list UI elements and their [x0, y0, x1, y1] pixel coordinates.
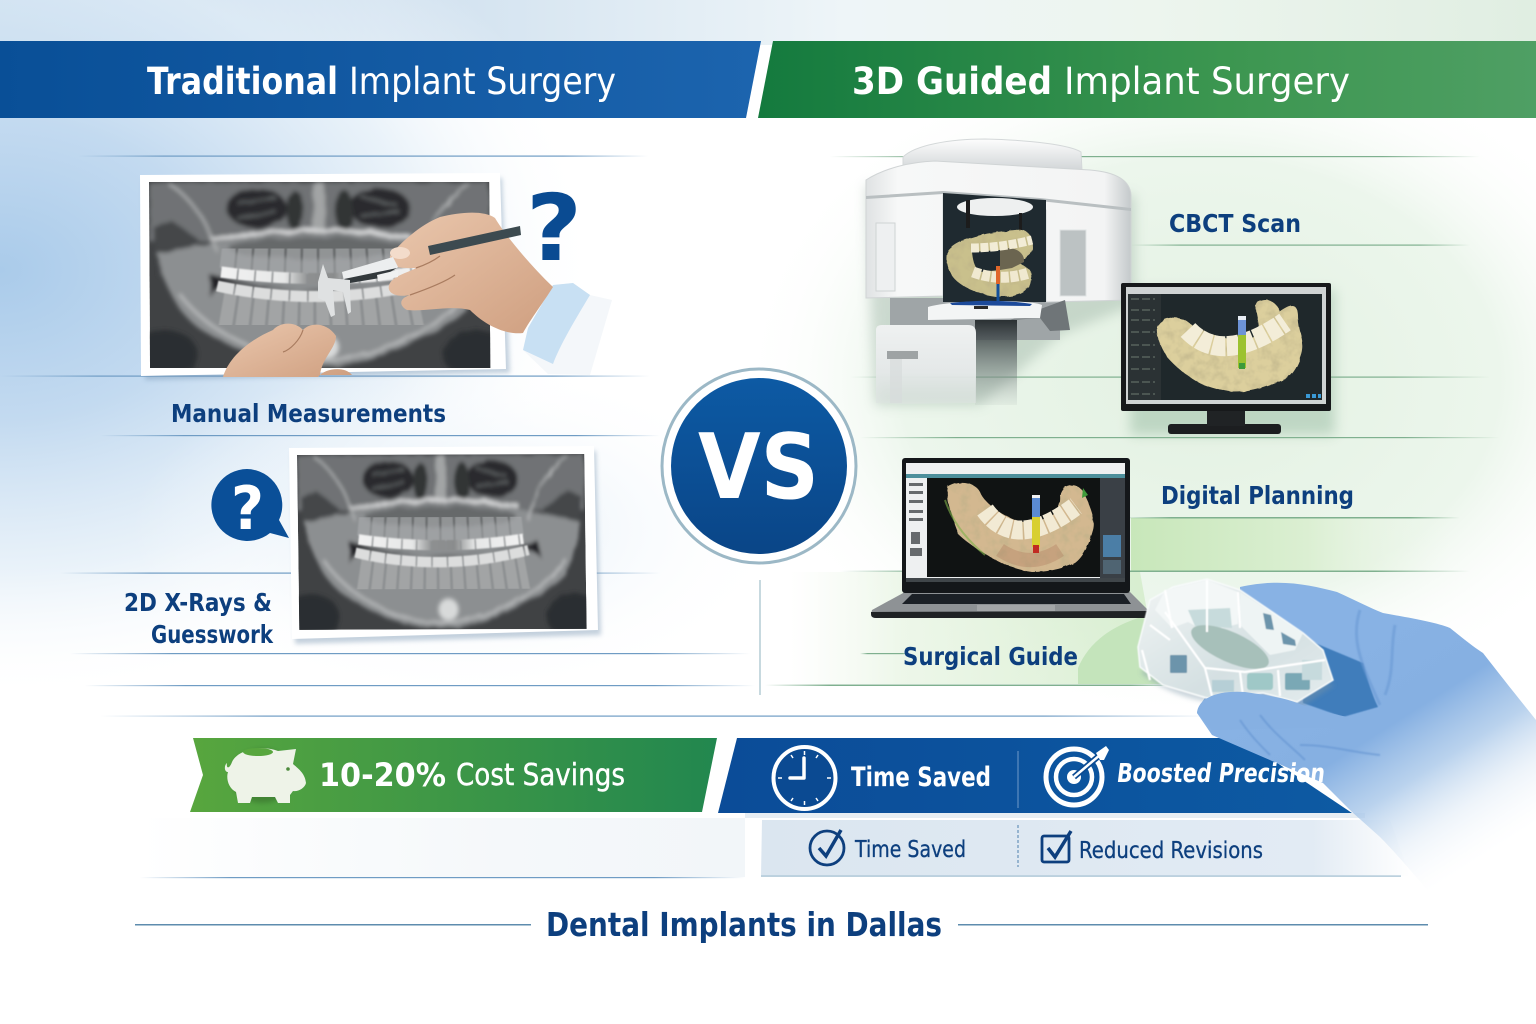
icon: check box — [1042, 831, 1071, 862]
VS badge: VS — [698, 415, 819, 520]
label: boosted precision: Boosted Precision — [1115, 759, 1327, 789]
sleeve — [523, 283, 612, 375]
surgical guide in gloved hand — [1138, 579, 1536, 920]
CBCT scanner — [866, 139, 1135, 405]
header: 3D guided implant surgery — [758, 41, 1536, 118]
sub panel: time saved and reduced revisions — [761, 820, 1410, 877]
dark chamber — [943, 193, 1046, 302]
label: CBCT scan: CBCT Scan — [1169, 209, 1301, 238]
label: digital planning: Digital Planning — [1161, 481, 1354, 510]
question bubble — [211, 469, 289, 544]
top cap — [903, 139, 1082, 170]
icon: piggy bank — [225, 748, 306, 803]
header: traditional implant surgery: Implant Surgery — [349, 60, 616, 103]
icon: clock — [774, 747, 836, 809]
bottom bar: cost savings: Cost Savings — [456, 758, 625, 793]
VS badge — [662, 369, 856, 563]
x-ray photo with caliper and hands — [129, 173, 612, 380]
lower hand — [223, 324, 352, 377]
icon: target — [1046, 746, 1109, 805]
clear guide — [1138, 579, 1335, 708]
header: traditional implant surgery: Traditional — [147, 60, 338, 103]
bottom bar: cost savings — [190, 738, 717, 812]
header: traditional implant surgery — [0, 41, 761, 118]
monitor — [1121, 283, 1335, 435]
label: 2D x-rays and guesswork: 2D X-Rays & — [124, 588, 272, 617]
guide lines — [0, 156, 1500, 878]
question mark: ? — [526, 175, 582, 282]
label: surgical guide: Surgical Guide — [903, 642, 1078, 671]
question bubble: ? — [231, 474, 264, 544]
column — [890, 298, 1060, 405]
glove — [1197, 583, 1536, 920]
header: 3D guided implant surgery: 3D Guided — [852, 60, 1052, 103]
chin rest — [928, 300, 1070, 331]
x-ray photo 2 — [280, 446, 604, 644]
jaw model — [946, 230, 1033, 302]
bottom bar: cost savings: 10-20% — [319, 756, 446, 794]
palm shadow — [1303, 638, 1378, 717]
thumb — [1197, 692, 1350, 730]
bottom bar: time saved — [718, 738, 1352, 813]
head — [866, 161, 1131, 302]
label: 2D x-rays and guesswork — [124, 588, 274, 649]
header: 3D guided implant surgery: Implant Surgery — [1064, 60, 1350, 103]
icon: check circle — [810, 830, 844, 865]
footer: dental implants in dallas: Dental Implants in Dallas — [546, 905, 942, 944]
caliper tool — [318, 226, 521, 317]
bottom bar: time saved: Time Saved — [851, 762, 991, 793]
jaw on laptop — [945, 483, 1094, 572]
label: manual measurements: Manual Measurements — [171, 399, 446, 428]
sub panel: time saved and reduced revisions: Reduced Revisions — [1079, 838, 1263, 864]
lower white box — [876, 325, 976, 404]
jaw on monitor — [1157, 300, 1303, 392]
laptop — [871, 458, 1149, 618]
sub panel: time saved and reduced revisions: Time Saved — [854, 837, 966, 863]
label: 2D x-rays and guesswork: Guesswork — [151, 620, 274, 649]
right hand — [389, 213, 553, 333]
